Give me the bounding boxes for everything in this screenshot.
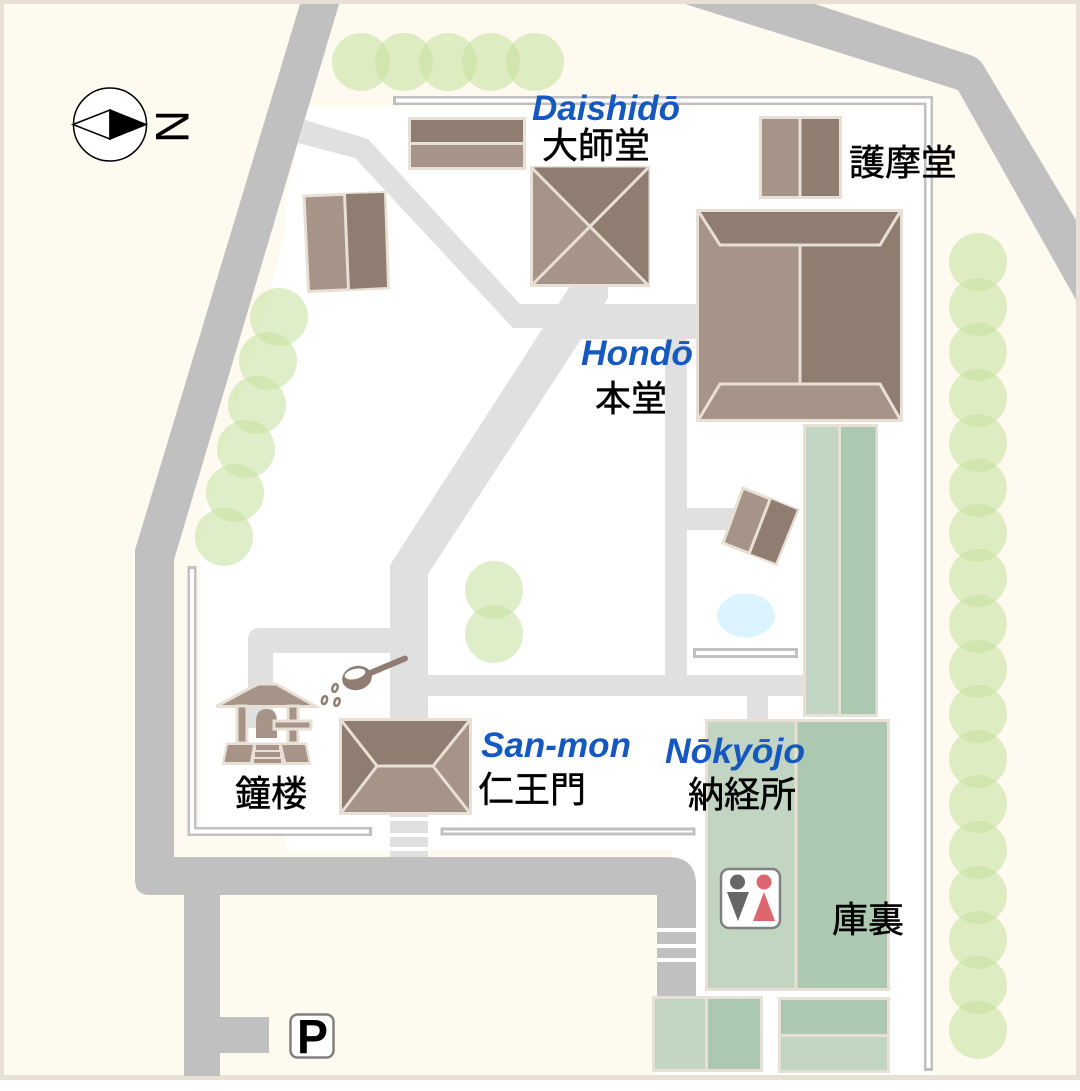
building: south annex [654, 998, 762, 1070]
icon: restroom [721, 869, 780, 928]
icon: water ladle [321, 658, 405, 707]
perimeter walls [192, 100, 928, 1071]
building: Nokyojo and Kuri [706, 720, 888, 990]
building: long corridor [804, 426, 876, 716]
label: San-mon kanji: 仁王門 [478, 769, 586, 810]
label: Nokyojo romaji: Nōkyōjo [665, 732, 805, 771]
precinct paths [248, 120, 804, 857]
icon: bell tower [216, 684, 316, 765]
building: north side hall [410, 118, 524, 168]
label: Daishido kanji: 大師堂 [542, 125, 650, 166]
building: south-east annex [780, 998, 888, 1072]
building: San-mon gate [340, 720, 470, 814]
label: bell tower kanji: 鐘楼 [235, 773, 307, 814]
building: Daishido [532, 168, 648, 286]
trees: right row [949, 233, 1007, 1059]
label: Nokyojo kanji: 納経所 [688, 774, 796, 815]
label: Hondo kanji: 本堂 [595, 378, 667, 419]
trees: top row [332, 33, 564, 91]
icon: compass with north arrow [73, 88, 199, 161]
building: Goma-do [760, 118, 840, 198]
label: Goma-do kanji: 護摩堂 [849, 142, 957, 183]
pond [717, 594, 775, 638]
building: Hondo main hall [698, 210, 902, 420]
building: small angled hut [723, 488, 798, 564]
label: Daishido romaji: Daishidō [532, 89, 680, 128]
icon: compass with north arrow: N [146, 110, 199, 143]
label: Hondo romaji: Hondō [581, 334, 693, 373]
trees: centre pair [465, 561, 523, 663]
label: San-mon romaji: San-mon [481, 726, 631, 765]
building: west hall [304, 192, 388, 292]
label: Kuri kanji: 庫裏 [832, 899, 904, 940]
trees: left row [195, 288, 308, 566]
icon: parking: P [297, 1011, 328, 1064]
